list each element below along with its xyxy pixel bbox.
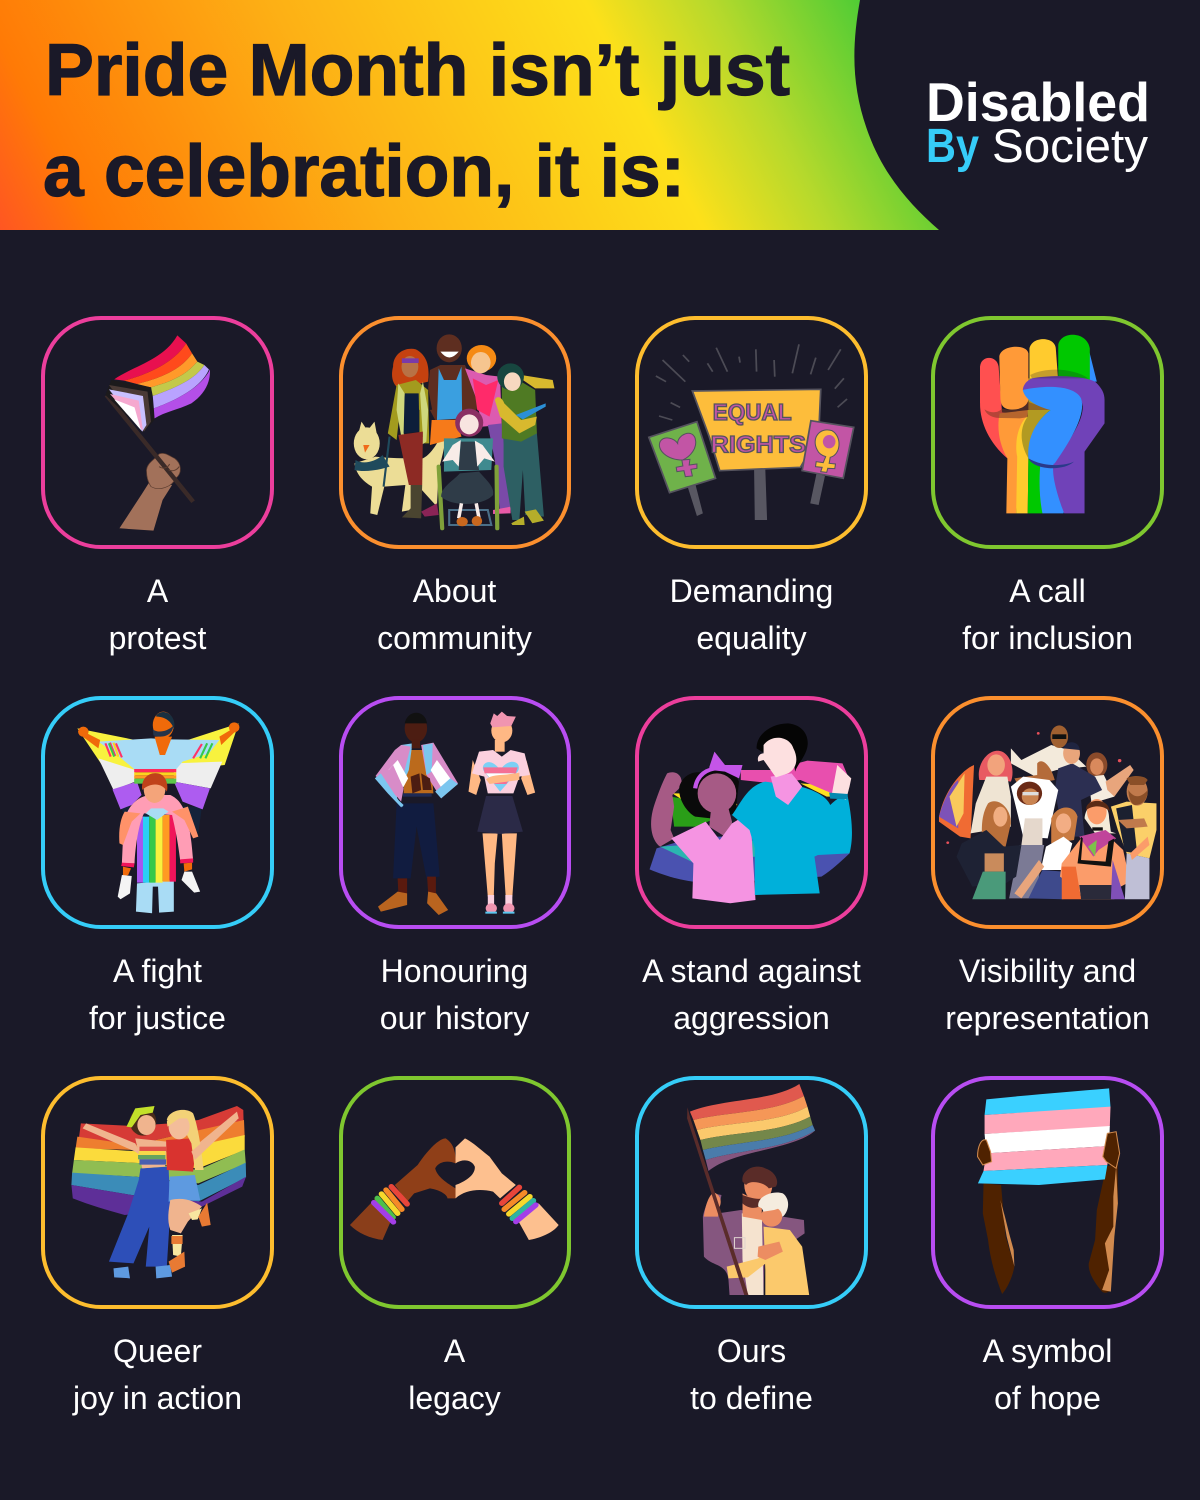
- card frame: [43, 1078, 272, 1307]
- label: joy in action: [72, 1380, 242, 1416]
- label: legacy: [408, 1380, 501, 1416]
- label: Demanding: [670, 573, 833, 609]
- panel: Visibility and representation: [933, 698, 1162, 1036]
- icon: diverse group with guide dog and wheelchair user: [354, 334, 554, 528]
- logo: Disabled By Society: By: [926, 120, 979, 173]
- icon: two men with non-binary flag and rainbow shirt: [77, 712, 239, 913]
- label: representation: [945, 1000, 1150, 1036]
- card frame: [43, 318, 272, 547]
- panel: Honouring our history: [341, 698, 569, 1036]
- label: to define: [690, 1380, 813, 1416]
- icon: hand waving progress pride flag: [105, 335, 210, 531]
- card frame: [637, 698, 866, 927]
- card frame: [933, 318, 1162, 547]
- title: a celebration, it is:: [43, 131, 685, 212]
- icon: raised arms holding trans flag: [978, 1088, 1120, 1294]
- panel: Ours to define: [637, 1078, 866, 1416]
- icon: man holding rainbow flag hugging partner: [687, 1084, 815, 1295]
- icon: crowd of diverse people with rainbow flag: [939, 725, 1156, 899]
- panel: A call for inclusion: [933, 318, 1162, 656]
- icon: two people with trans flag shawl and heart shirt: [375, 712, 535, 915]
- label: of hope: [994, 1380, 1101, 1416]
- card frame: [933, 1078, 1162, 1307]
- label: A stand against: [642, 953, 861, 989]
- logo: Disabled By Society: Society: [992, 119, 1148, 172]
- label: A call: [1009, 573, 1086, 609]
- label: About: [413, 573, 496, 609]
- header banner: [0, 0, 939, 230]
- card frame: [43, 698, 272, 927]
- label: A fight: [113, 953, 202, 989]
- logo: Disabled By Society: Disabled: [926, 71, 1150, 133]
- card frame: [341, 318, 569, 547]
- icon: two women with rainbow flag: [71, 1106, 246, 1278]
- title: Pride Month isn’t just: [45, 30, 790, 111]
- panel: A stand against aggression: [637, 698, 866, 1036]
- panel: Queer joy in action: [43, 1078, 272, 1416]
- label: our history: [380, 1000, 529, 1036]
- icon: equal rights protest signs: EQUAL: [713, 400, 792, 425]
- icon: rainbow raised fist: [980, 335, 1105, 513]
- label: A symbol: [983, 1333, 1112, 1369]
- icon: equal rights protest signs: RIGHTS: [711, 432, 806, 458]
- label: Ours: [717, 1333, 786, 1369]
- label: for justice: [89, 1000, 226, 1036]
- label: for inclusion: [962, 620, 1133, 656]
- card frame: [637, 318, 866, 547]
- label: protest: [109, 620, 207, 656]
- icon: couple with rainbow flag: [650, 723, 852, 903]
- panel: A symbol of hope: [933, 1078, 1162, 1416]
- label: A: [444, 1333, 466, 1369]
- icon: equal rights protest signs: [649, 344, 854, 520]
- card frame: [933, 698, 1162, 927]
- label: aggression: [673, 1000, 830, 1036]
- label: Queer: [113, 1333, 202, 1369]
- panel: About community: [341, 318, 569, 656]
- label: Honouring: [381, 953, 528, 989]
- icon: two hands forming a heart with rainbow bands: [350, 1138, 559, 1240]
- panel: Demanding equality: [637, 318, 866, 656]
- card frame: [341, 698, 569, 927]
- label: community: [377, 620, 532, 656]
- panel: A protest: [43, 318, 272, 656]
- panel: A legacy: [341, 1078, 569, 1416]
- panel: A fight for justice: [43, 698, 272, 1036]
- card frame: [637, 1078, 866, 1307]
- label: equality: [696, 620, 807, 656]
- card frame: [341, 1078, 569, 1307]
- label: A: [147, 573, 169, 609]
- label: Visibility and: [959, 953, 1136, 989]
